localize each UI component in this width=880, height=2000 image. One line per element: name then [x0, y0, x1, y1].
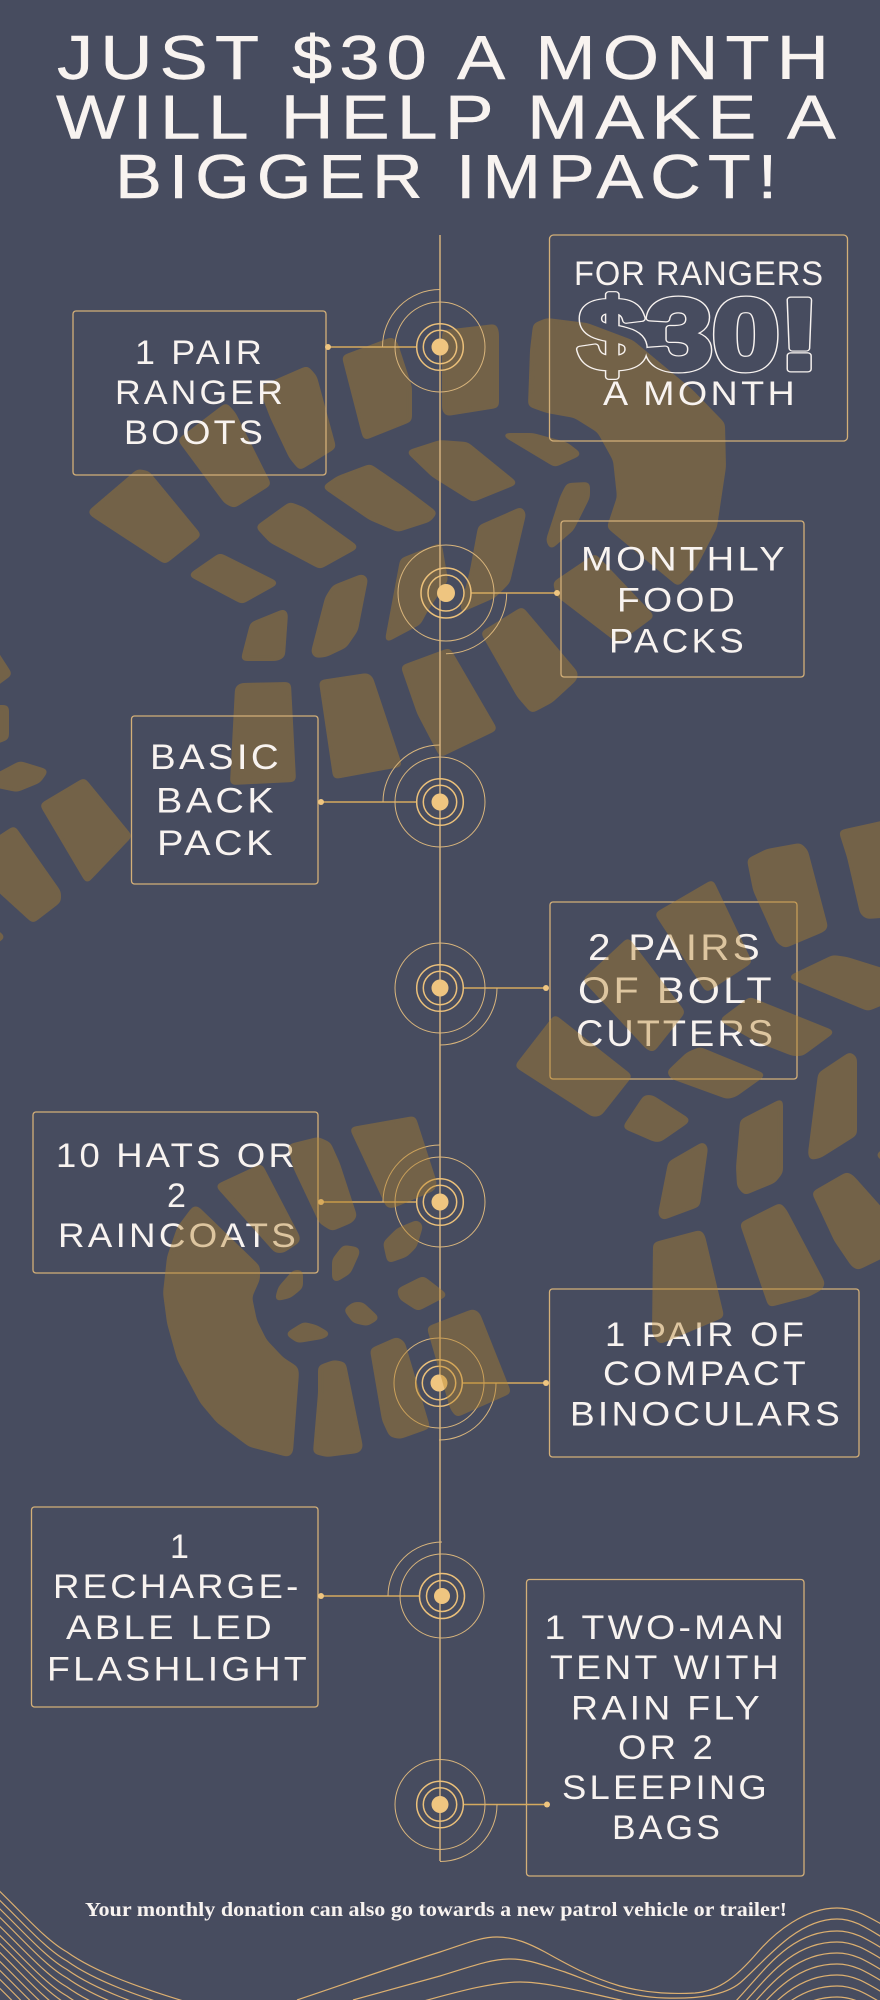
item: 1 pair ranger boots: [73, 311, 326, 475]
callout: for rangers $30 a month: A MONTH: [603, 375, 798, 413]
node: ranger boots: [325, 290, 485, 392]
item: 1 rechargeable LED flashlight: 1: [170, 1528, 192, 1566]
item: 1 rechargeable LED flashlight: ABLE LED: [66, 1609, 275, 1647]
item: 1 rechargeable LED flashlight: RECHARGE-: [53, 1568, 302, 1606]
item: basic back pack: BACK: [156, 782, 277, 820]
item: 1 two-man tent or 2 sleeping bags: SLEEPING: [562, 1769, 770, 1807]
item: 1 two-man tent or 2 sleeping bags: 1 TWO-MAN: [544, 1609, 787, 1647]
item: 2 pairs of bolt cutters: [550, 902, 797, 1079]
item: 1 pair of compact binoculars: [550, 1289, 859, 1457]
item: 10 hats or 2 raincoats: 2: [167, 1177, 189, 1215]
node: back pack: [318, 745, 485, 847]
item: 1 pair ranger boots: 1 PAIR: [135, 334, 265, 372]
node: tent: [395, 1760, 550, 1862]
item: 10 hats or 2 raincoats: RAINCOATS: [58, 1217, 299, 1255]
item: monthly food packs: MONTHLY: [581, 540, 788, 578]
node: raincoats: [318, 1145, 485, 1247]
item: 2 pairs of bolt cutters: OF BOLT: [578, 970, 775, 1011]
item: 1 two-man tent or 2 sleeping bags: TENT WITH: [550, 1649, 782, 1687]
title: [56, 24, 843, 212]
item: 1 pair of compact binoculars: COMPACT: [603, 1355, 809, 1393]
item: monthly food packs: FOOD: [617, 582, 738, 620]
item: 1 two-man tent or 2 sleeping bags: BAGS: [612, 1809, 723, 1847]
callout: for rangers $30 a month: $30!: [578, 279, 820, 391]
item: basic back pack: [132, 716, 318, 884]
title: JUST $30 A MONTH: [57, 24, 836, 93]
item: 1 rechargeable LED flashlight: [32, 1507, 318, 1707]
item: 1 pair ranger boots: BOOTS: [124, 414, 266, 452]
item: 10 hats or 2 raincoats: [33, 1112, 318, 1273]
item: 2 pairs of bolt cutters: 2 PAIRS: [588, 927, 763, 968]
item: 1 pair ranger boots: RANGER: [115, 374, 286, 412]
boot print: right tread over the text: [517, 820, 880, 1342]
decorative waves: bottom left: [0, 1880, 190, 2000]
callout: for rangers $30 a month: [550, 235, 848, 441]
item: basic back pack: BASIC: [150, 738, 282, 777]
title: BIGGER IMPACT!: [115, 143, 784, 212]
item: 1 two-man tent or 2 sleeping bags: [526, 1580, 804, 1876]
node: bolt cutters: [395, 943, 549, 1045]
title: WILL HELP MAKE A: [56, 84, 843, 152]
item: monthly food packs: [561, 521, 804, 677]
item: 1 two-man tent or 2 sleeping bags: RAIN FLY: [571, 1690, 763, 1728]
node: flashlight: [318, 1542, 484, 1638]
callout: for rangers $30 a month: FOR RANGERS: [574, 255, 824, 293]
node: binoculars: [394, 1338, 549, 1440]
item: monthly food packs: PACKS: [609, 622, 747, 660]
item: 1 pair of compact binoculars: BINOCULARS: [570, 1396, 843, 1434]
boot print: left edge fragments: [0, 640, 130, 947]
footer note: Your monthly donation can also go towards a new patrol vehicle or trailer!: [85, 1899, 787, 1921]
item: 1 pair of compact binoculars: 1 PAIR OF: [605, 1316, 807, 1354]
timeline vertical line: [439, 235, 441, 1861]
node: food packs: [398, 545, 560, 654]
boot print: lower left tread over the text: [165, 1118, 509, 1455]
decorative waves: bottom centre and right: [297, 1908, 880, 2000]
item: 2 pairs of bolt cutters: CUTTERS: [576, 1013, 776, 1054]
item: basic back pack: PACK: [157, 824, 276, 863]
item: 10 hats or 2 raincoats: 10 HATS OR: [56, 1137, 298, 1175]
boot print: top tread under the text: [90, 320, 724, 783]
item: 1 rechargeable LED flashlight: FLASHLIGHT: [47, 1650, 310, 1688]
item: 1 two-man tent or 2 sleeping bags: OR 2: [618, 1729, 716, 1767]
